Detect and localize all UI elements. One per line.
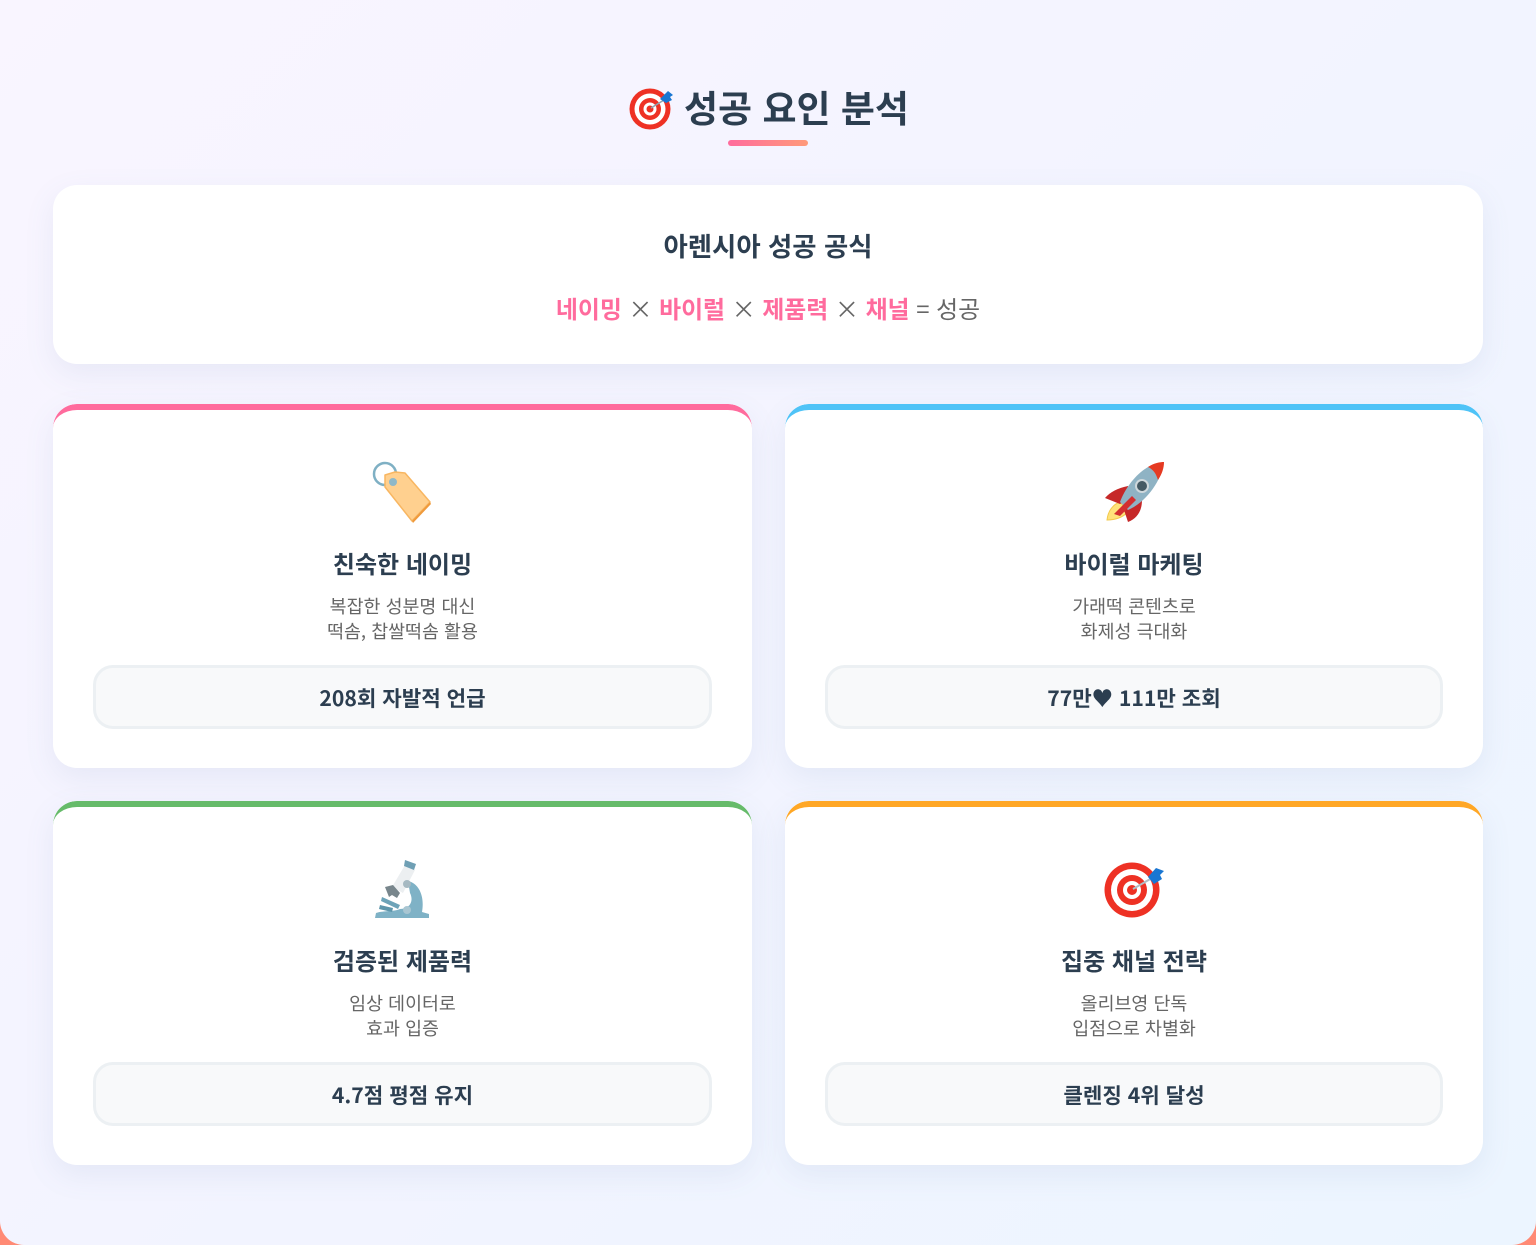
title text: 성공 요인 분석: [684, 79, 909, 133]
stat box: [825, 1062, 1443, 1126]
stat box: [93, 1062, 712, 1126]
panel: channel: [785, 801, 1483, 1165]
formula text: 네이밍 × 바이럴 × 제품력 × 채널 = 성공: [556, 290, 980, 325]
card description: 임상 데이터로: [349, 990, 456, 1016]
card description: [1072, 990, 1196, 1041]
icon: tag: [372, 462, 431, 523]
card description: [1072, 593, 1196, 644]
icon: title target: [630, 88, 673, 130]
stat box: [93, 665, 712, 729]
stat box: [825, 665, 1443, 729]
card description: 떡솜, 찹쌀떡솜 활용: [327, 618, 478, 644]
stat box: 클렌징 4위 달성: [1063, 1079, 1205, 1110]
card description: 가래떡 콘텐츠로: [1072, 593, 1196, 619]
panel: product: [53, 801, 752, 1165]
panel: naming: [53, 404, 752, 768]
panel: success formula: [53, 185, 1483, 364]
card title: 친숙한 네이밍: [333, 545, 472, 580]
panel: viral: [785, 404, 1483, 768]
card description: 화제성 극대화: [1081, 618, 1187, 644]
icon: microscope: [375, 860, 429, 918]
card description: [349, 990, 456, 1041]
card description: 효과 입증: [366, 1015, 439, 1041]
card title: 집중 채널 전략: [1061, 942, 1207, 977]
card description: 올리브영 단독: [1081, 990, 1187, 1016]
card title: 바이럴 마케팅: [1064, 545, 1204, 580]
card title: 검증된 제품력: [333, 942, 472, 977]
icon: rocket: [1105, 462, 1164, 522]
icon: target: [1104, 862, 1164, 918]
card description: 입점으로 차별화: [1072, 1015, 1196, 1041]
formula heading: 아렌시아 성공 공식: [663, 224, 872, 264]
card description: [327, 593, 478, 644]
title underline: [728, 140, 808, 146]
stat box: 208회 자발적 언급: [319, 682, 486, 713]
stat box: 77만♥ 111만 조회: [1047, 682, 1221, 713]
stat box: 4.7점 평점 유지: [332, 1079, 473, 1110]
card description: 복잡한 성분명 대신: [330, 593, 475, 619]
